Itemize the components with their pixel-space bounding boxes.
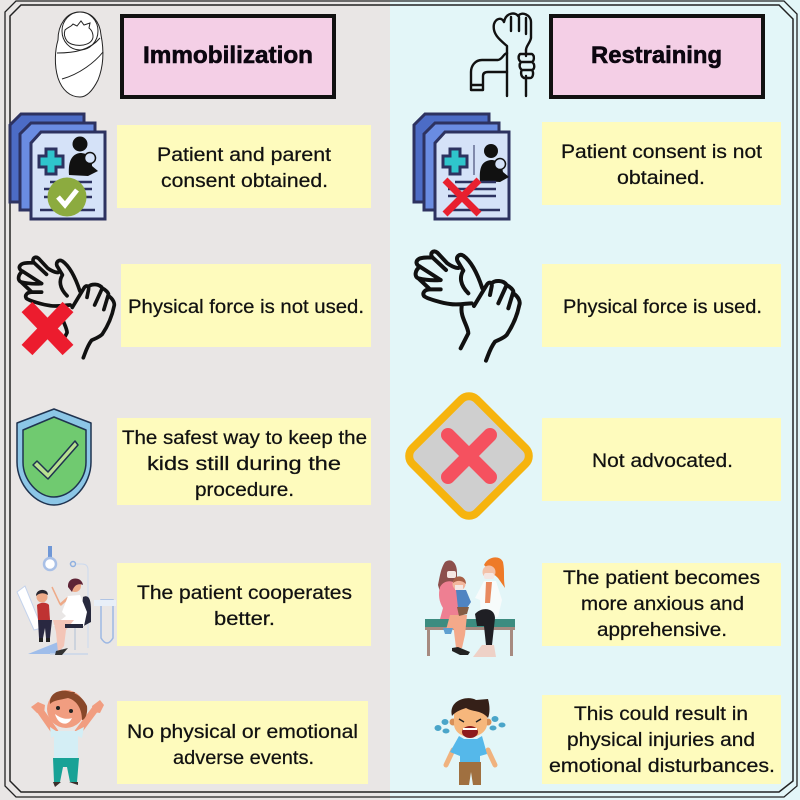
icon: gripping hands [416,251,520,361]
heading: Restraining [551,16,763,97]
text: physical injuries: physical injuries and [567,729,755,751]
icon: warning diamond with cross [405,392,533,520]
text: safest way: The safest way to keep the [122,427,367,449]
icon: consent documents with cross [414,114,509,219]
text: not advocated [542,418,781,501]
text: cooperates [117,563,371,646]
panel background: restraining [390,0,800,800]
text: physical injuries: emotional disturbances. [549,755,775,777]
text: not advocated: Not advocated. [592,450,733,472]
text: consent not obtained: Patient consent is not [561,141,763,163]
text: no adverse events: adverse events. [173,747,314,769]
illustration: happy child [31,690,104,787]
text: physical injuries [542,695,781,784]
text: safest way: procedure. [195,479,294,501]
icon: consent documents with check [10,114,105,219]
illustration: parent, child and nurse [425,557,515,657]
text: consent obtained [117,125,371,208]
text: consent obtained: Patient and parent [157,144,332,166]
icon: swaddled baby [55,12,103,97]
text: safest way [117,418,371,505]
illustration: dentist and child [17,546,116,655]
text: cooperates: better. [214,608,275,630]
heading: Immobilization [122,16,334,97]
text: more anxious: apprehensive. [597,619,727,641]
text: more anxious [542,563,781,646]
icon: hands crossed out [19,257,114,358]
text: force used: Physical force is used. [563,296,762,318]
heading: Immobilization: Immobilization [143,42,313,69]
text: consent not obtained: obtained. [617,167,705,189]
text: physical injuries: This could result in [574,703,748,725]
text: cooperates: The patient cooperates [137,582,352,604]
text: more anxious: The patient becomes [563,567,760,589]
icon: green shield with check [17,409,91,505]
text: consent not obtained [542,122,781,205]
text: force not used: Physical force is not used. [128,296,364,318]
text: safest way: kids still during the [147,453,341,475]
illustration: crying child [434,698,506,785]
text: no adverse events: No physical or emotional [127,721,358,743]
text: no adverse events [117,701,368,784]
panel: restraining [405,14,781,785]
panel: immobilization [10,12,371,787]
text: force not used [121,264,371,347]
text: force used [542,264,781,347]
text: more anxious: more anxious and [581,593,744,615]
text: consent obtained: consent obtained. [161,170,328,192]
panel background: immobilization [0,0,390,800]
icon: restraining hand and wrist [471,14,534,96]
heading: Restraining: Restraining [591,42,722,69]
